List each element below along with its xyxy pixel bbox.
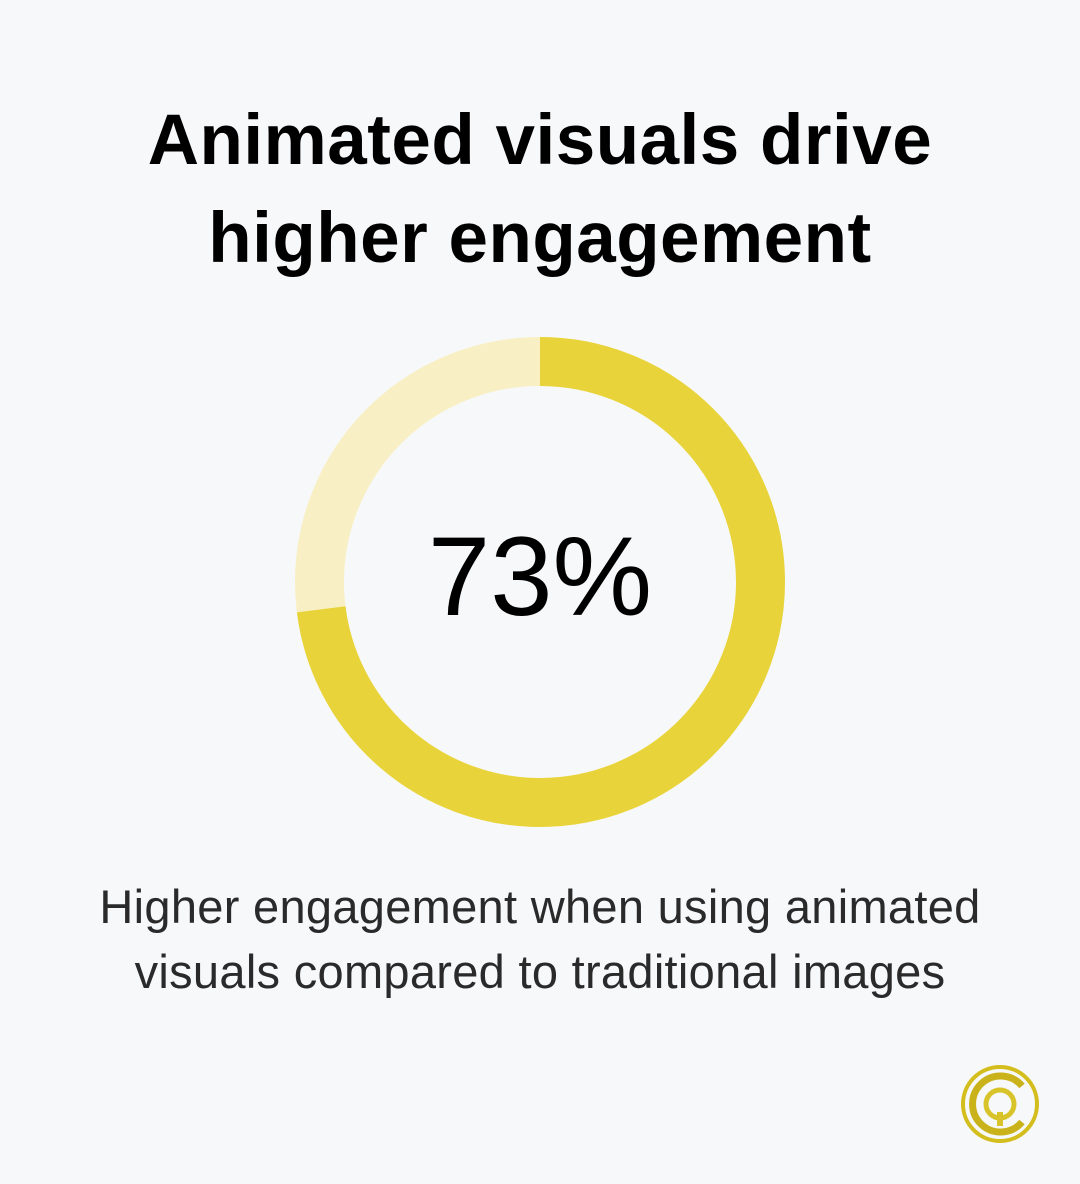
description: visuals compared to traditional images xyxy=(135,945,945,998)
icon: logo xyxy=(961,1065,1039,1143)
title: higher engagement xyxy=(208,199,872,278)
donut remainder xyxy=(320,362,760,802)
donut value 73% xyxy=(320,362,760,802)
title xyxy=(148,101,932,278)
percent label: 73% xyxy=(428,514,652,639)
description xyxy=(99,880,981,998)
title: Animated visuals drive xyxy=(148,101,932,180)
description: Higher engagement when using animated xyxy=(99,880,981,933)
